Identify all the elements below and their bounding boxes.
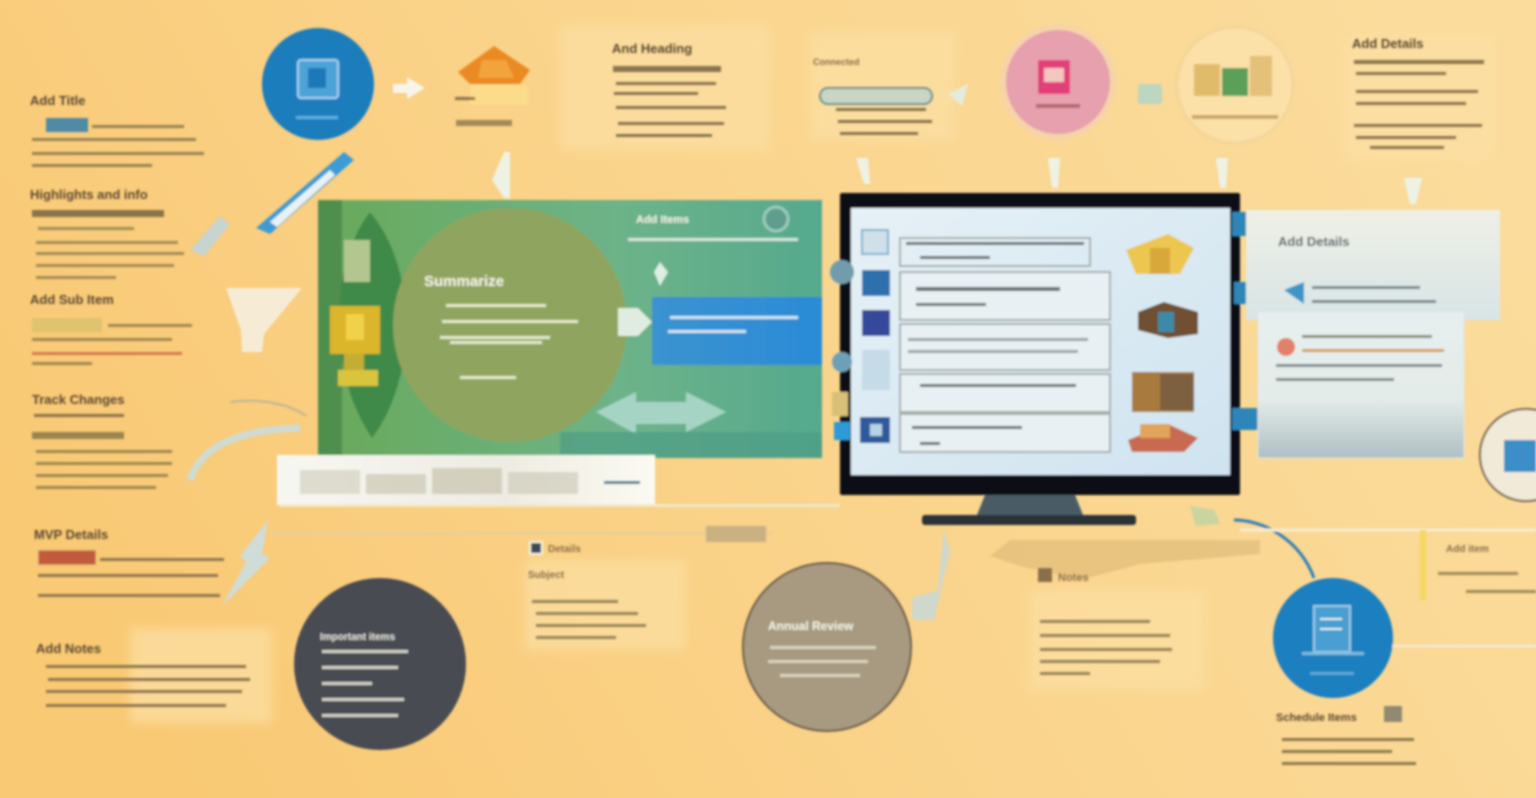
arrow: pale double bbox=[596, 392, 726, 434]
soft light panels bbox=[130, 25, 1495, 723]
panel: right upper card bbox=[1246, 210, 1500, 320]
icon: orange house bbox=[455, 46, 530, 126]
icon: taupe circle with text bbox=[743, 563, 911, 731]
arrow: to pale circle bbox=[1138, 84, 1162, 104]
text block: left 2: Highlights and info bbox=[30, 187, 148, 202]
icon: curved arrow left bbox=[190, 401, 306, 480]
text block: bottom left bbox=[36, 641, 250, 707]
monitor edge tabs bbox=[830, 212, 1264, 440]
text block: top centre: And Heading bbox=[612, 41, 692, 56]
blue box bbox=[652, 297, 822, 365]
icon: blue circle top bbox=[262, 28, 374, 140]
monitor product icons bbox=[1126, 234, 1198, 452]
stand shadow band bbox=[990, 540, 1260, 580]
arrow: curved blue connector bbox=[1234, 520, 1536, 646]
text block: left 2 bbox=[30, 187, 184, 279]
icon: pale circle with boxes bbox=[1177, 27, 1293, 143]
text block: panel with small chart bbox=[813, 57, 932, 135]
text block: bottom left: Add Notes bbox=[36, 641, 101, 656]
monitor list rows bbox=[900, 238, 1110, 452]
icon: partial circle right edge bbox=[1480, 409, 1536, 501]
arrow: to house icon bbox=[393, 77, 425, 99]
panel: right lower card bbox=[1258, 312, 1464, 458]
text block: left 3 bbox=[30, 292, 192, 365]
text block: bottom centre bbox=[1038, 568, 1172, 675]
decorative connector bbox=[272, 532, 772, 535]
text block: left 4: Track Changes bbox=[32, 392, 124, 407]
text block: right edge bbox=[1420, 530, 1536, 600]
white strip bbox=[277, 455, 840, 507]
icon: small connector bbox=[1190, 506, 1220, 526]
icon: blocks connector bbox=[706, 526, 766, 542]
text block: small card bbox=[528, 542, 646, 639]
leaf shape bbox=[339, 212, 406, 438]
panel: right upper card: Add Details bbox=[1278, 234, 1350, 249]
text block: top centre bbox=[612, 41, 726, 137]
icon: pink circle bbox=[1000, 24, 1116, 140]
text block: left 1 bbox=[30, 93, 204, 167]
icon: dark circle with text bbox=[294, 578, 466, 750]
text block: top right bbox=[1352, 36, 1484, 149]
icon: funnel bbox=[226, 288, 302, 352]
text block: bottom right: Schedule Items bbox=[1276, 712, 1357, 724]
icon: taupe circle with text: Annual Review bbox=[768, 619, 854, 633]
text block: bottom right bbox=[1276, 706, 1416, 765]
icon: arrow next to taupe circle bbox=[912, 530, 950, 620]
text block: left 4 bbox=[32, 392, 172, 489]
text block: left 5: MVP Details bbox=[34, 527, 108, 542]
arrow: to pink circle bbox=[948, 84, 968, 106]
text block: right edge: Add item bbox=[1446, 544, 1489, 555]
panel: green hero: Summarize bbox=[424, 273, 504, 290]
connectors above monitor bbox=[492, 152, 1422, 204]
monitor sidebar icons bbox=[860, 230, 890, 443]
icon: pen bbox=[190, 152, 354, 256]
icon: trophy bbox=[330, 306, 380, 386]
text block: small card: Details bbox=[548, 544, 581, 555]
icon: lightning arrow bbox=[222, 520, 270, 606]
icon: blue circle bottom bbox=[1273, 578, 1393, 698]
text block: panel with small chart: Connected bbox=[813, 57, 860, 67]
text block: left 5 bbox=[34, 527, 224, 597]
big circle bbox=[393, 208, 627, 442]
monitor bbox=[830, 193, 1264, 525]
panel: green hero: Add Items bbox=[636, 214, 689, 226]
text block: left 1: Add Title bbox=[30, 93, 85, 108]
text block: left 3: Add Sub Item bbox=[30, 292, 114, 307]
icon: dark circle with text: Important items bbox=[320, 632, 395, 643]
text block: top right: Add Details bbox=[1352, 36, 1424, 51]
text block: small card: Subject bbox=[528, 570, 565, 581]
panel: green hero bbox=[318, 200, 822, 458]
text block: bottom centre: Notes bbox=[1058, 572, 1089, 584]
